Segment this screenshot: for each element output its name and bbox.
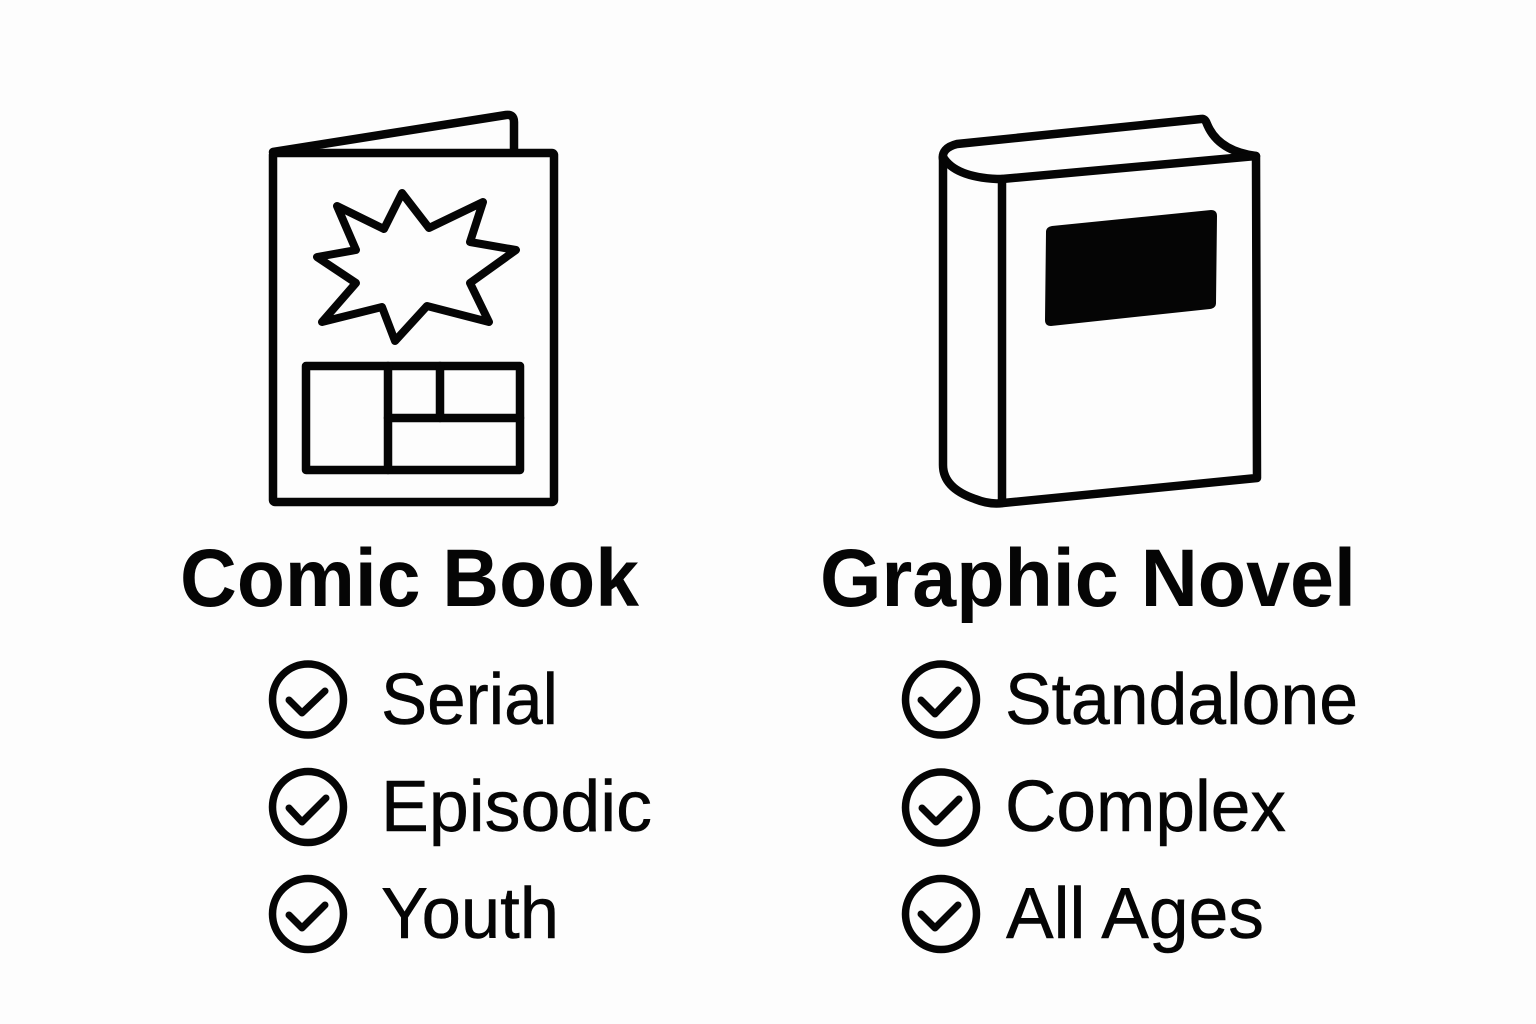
icon: hardcover book [943, 119, 1257, 503]
heading: Graphic Novel: Graphic Novel [820, 533, 1356, 624]
icon: comic book [273, 115, 554, 502]
heading: Comic Book: Comic Book [180, 533, 639, 624]
list item: Serial: Serial [381, 660, 558, 740]
list item: Episodic: Episodic [381, 767, 652, 847]
list item: Youth: Youth [381, 874, 559, 954]
list item: Youth [272, 874, 559, 954]
list item: All Ages: All Ages [1006, 874, 1264, 954]
list item: Standalone: Standalone [1005, 660, 1358, 740]
panel: comic book [180, 115, 652, 954]
list item: Complex: Complex [1005, 767, 1286, 847]
list item: Serial [272, 660, 558, 740]
panel: graphic novel [820, 119, 1358, 954]
